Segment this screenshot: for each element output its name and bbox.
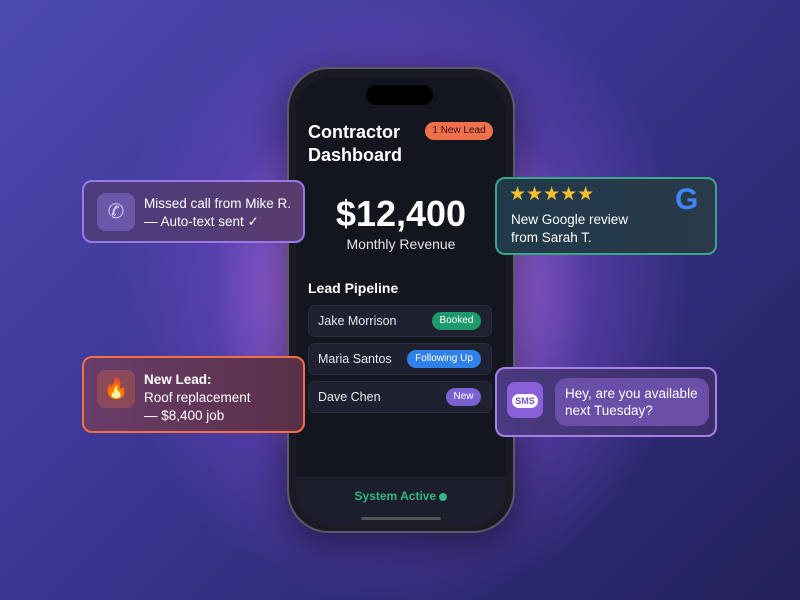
card: missed call: — Auto-text sent ✓ [144,214,259,229]
message bubble: next Tuesday? [565,403,653,418]
lead row: Maria: Maria Santos [318,352,392,366]
icon: fire [97,370,135,408]
message bubble [555,378,709,426]
card: google review: from Sarah T. [511,230,592,245]
lead row: Dave [308,381,492,413]
lead row: Jake [308,305,492,337]
lead row: Maria: Following Up [415,353,473,364]
lead row: Dave: New [453,391,474,402]
icon: phone: ✆ [108,201,124,223]
lead row: Jake: Booked [440,315,473,326]
dashboard title: Dashboard [308,145,402,165]
status bar: System Active [355,489,436,503]
icon: google: G [675,183,698,216]
lead row: Maria [308,343,492,375]
screen [296,77,506,525]
status bar [296,477,506,525]
card: new lead: — $8,400 job [144,408,224,423]
revenue [336,193,466,252]
card: google review: New Google review [511,212,628,227]
lead pipeline heading: Lead Pipeline [308,280,398,296]
dynamic island [366,85,433,105]
icon: sms: SMS [515,396,535,406]
icon: sms [507,382,543,418]
badge: 1 new lead [425,122,493,140]
lead row: Jake: Jake Morrison [318,314,396,328]
dashboard title [308,122,402,165]
card: missed call: Missed call from Mike R. [144,196,291,211]
phone [287,67,515,533]
icon: phone [97,193,135,231]
lead row: Dave: Dave Chen [318,390,381,404]
message bubble: Hey, are you available [565,386,698,401]
card: missed call [82,180,305,243]
card: new lead: New Lead: [144,372,212,387]
card: sms [495,367,717,437]
card: new lead: Roof replacement [144,390,251,405]
dashboard title: Contractor [308,122,400,142]
stars: ★★★★★ [509,184,594,205]
badge: 1 new lead: 1 New Lead [432,125,486,136]
revenue: Monthly Revenue [347,236,455,252]
icon: fire: 🔥 [104,378,128,400]
card: new lead [82,356,305,433]
revenue: $12,400 [336,193,466,234]
card: google review [495,177,717,255]
